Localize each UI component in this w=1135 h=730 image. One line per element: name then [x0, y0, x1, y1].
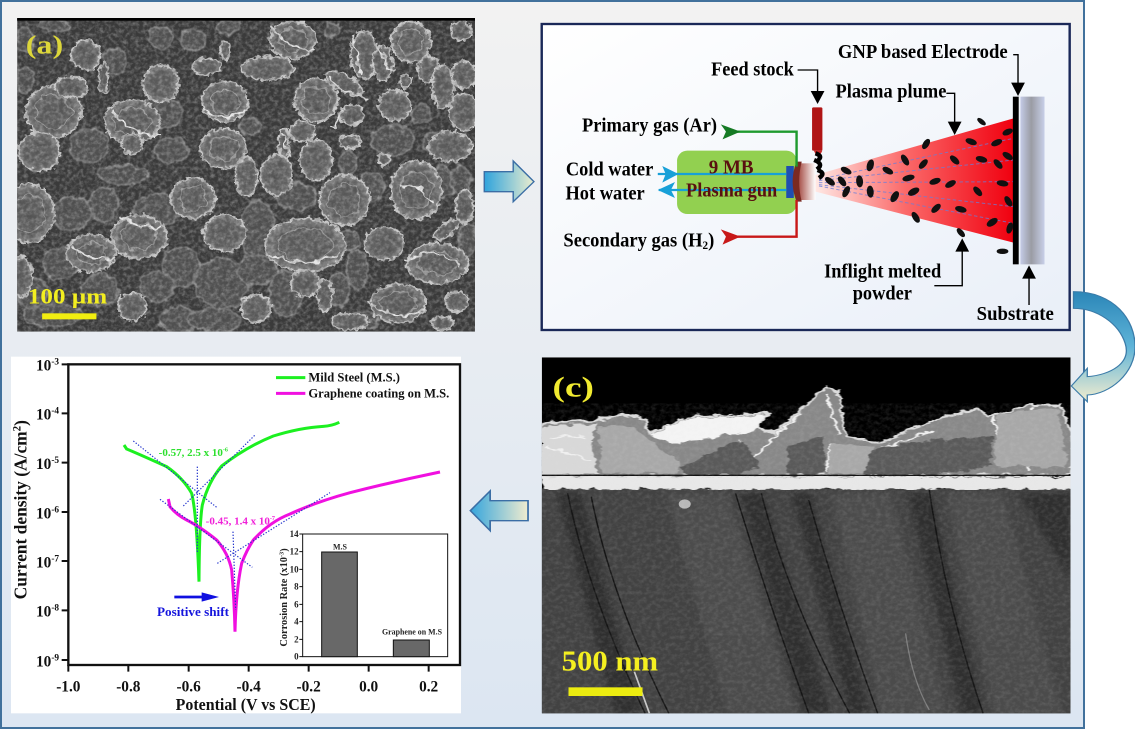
label: Inflight melted powder: powder — [853, 283, 912, 304]
substrate — [1020, 97, 1045, 264]
label: Cold water: Cold water — [566, 159, 653, 180]
scale bar 100 µm — [28, 284, 107, 319]
y axis title: ) — [11, 420, 32, 426]
x axis labels: -0.8 — [116, 678, 141, 695]
y axis labels: -7 — [51, 554, 59, 564]
primary gas line — [721, 124, 797, 167]
substrate layer — [542, 488, 1070, 713]
y axis labels: 10 — [36, 554, 51, 571]
cold water line — [658, 166, 786, 183]
x axis labels: 0.2 — [419, 678, 438, 695]
y axis labels: 10 — [36, 653, 51, 670]
panel: SEM image (a) of powder — [3, 18, 479, 333]
scale bar 100 µm: 100 µm — [28, 284, 107, 308]
inset bar chart: 4 — [294, 617, 299, 627]
inset bar chart: 2 — [294, 634, 299, 644]
curve: graphene coating — [168, 472, 440, 632]
panel: polarization chart — [11, 357, 461, 714]
inset bar chart: 6 — [294, 599, 299, 609]
arrow: panel c to chart — [470, 491, 528, 531]
panel: plasma spray schematic (b) — [542, 24, 1070, 330]
y axis labels: 10 — [36, 505, 51, 522]
label: Plasma plume — [835, 81, 962, 135]
label: GNP based Electrode: GNP based Electrode — [838, 41, 1008, 63]
inset bar chart: 0 — [294, 652, 299, 662]
positive shift arrow — [174, 592, 219, 602]
y axis title: 2 — [12, 425, 24, 431]
inset bar chart: Graphene on M.S — [382, 627, 443, 636]
y axis title: Current density (A/cm — [11, 426, 31, 599]
y axis labels: -8 — [51, 604, 59, 614]
inset bar chart: ) — [278, 548, 290, 552]
label: Feed stock — [711, 59, 824, 104]
legend: Mild Steel (M.S.) — [308, 371, 400, 385]
y axis labels: 10 — [36, 407, 51, 424]
scale bar 500 nm: 500 nm — [562, 646, 658, 677]
scale bar 500 nm — [562, 646, 658, 696]
value label magenta: -0.45, 1.4 x 10 — [206, 517, 268, 528]
value label magenta: -7 — [270, 516, 275, 522]
positive shift label: Positive shift — [157, 605, 230, 619]
y axis labels: -5 — [51, 456, 59, 466]
y axis labels: 10 — [36, 456, 51, 473]
label: Secondary gas (H2): 2 — [703, 238, 708, 252]
inset bar chart: 8 — [294, 582, 299, 592]
arrow: panel a to panel b — [484, 161, 534, 202]
bright interface band — [542, 477, 1076, 489]
x axis labels: -0.6 — [177, 678, 201, 695]
inset bar chart: Corrosion Rate (x10 — [278, 552, 290, 647]
legend — [276, 371, 449, 401]
x axis labels: -0.2 — [297, 678, 321, 695]
value label green: -6 — [223, 447, 228, 453]
y axis labels: -3 — [51, 358, 59, 368]
panel label (c): (c) — [553, 372, 594, 403]
curved arrow: panel b to panel c — [1071, 292, 1135, 402]
electrode — [1013, 97, 1019, 264]
coating layer — [542, 387, 1074, 477]
y axis labels: 10 — [36, 604, 51, 621]
label: Hot water: Hot water — [565, 183, 645, 204]
label: Primary gas (Ar): Primary gas (Ar) — [582, 115, 717, 136]
plasma gun body — [677, 151, 816, 214]
panel label (a): (a) — [26, 30, 63, 59]
label: Feed stock: Feed stock — [711, 59, 794, 81]
inset bar chart: 10 — [290, 564, 299, 574]
panel: SEM cross-section image (c) — [542, 357, 1076, 713]
tangent lines — [133, 435, 330, 610]
y axis labels: -4 — [51, 407, 59, 417]
legend: Graphene coating on M.S. — [308, 387, 449, 401]
y axis labels — [36, 358, 59, 670]
label: 9 MB plasma gun: Plasma gun — [686, 180, 777, 201]
label: Substrate — [977, 265, 1054, 325]
x axis title: Potential (V vs SCE) — [176, 695, 316, 714]
y axis labels: -9 — [51, 653, 59, 663]
y axis labels: 10 — [36, 358, 51, 375]
label: Substrate: Substrate — [977, 303, 1054, 325]
inset bar chart: -3 — [279, 551, 286, 557]
x axis labels: 0.0 — [359, 678, 379, 695]
label: Secondary gas (H2): Secondary gas (H — [563, 230, 718, 251]
label: Inflight melted powder: Inflight melted — [824, 261, 942, 282]
label: Inflight melted powder — [824, 238, 969, 304]
label: 9 MB plasma gun: 9 MB — [709, 157, 754, 178]
label: GNP based Electrode — [838, 41, 1025, 96]
inset bar chart — [278, 529, 448, 662]
hot water line — [658, 182, 786, 198]
x axis labels: -0.4 — [237, 678, 261, 695]
secondary gas line — [721, 200, 797, 245]
y axis labels: -6 — [51, 505, 59, 515]
label: 9 MB plasma gun — [686, 157, 777, 201]
inset bar chart: 14 — [290, 529, 299, 539]
inset bar chart: M.S — [333, 542, 348, 551]
spray dashed lines — [819, 138, 1014, 223]
inflight melted particles — [824, 118, 1013, 253]
chart axes — [62, 364, 460, 672]
feed stock injector — [812, 107, 822, 178]
value label green: -0.57, 2.5 x 10 — [159, 448, 221, 459]
label: Plasma plume: Plasma plume — [835, 81, 946, 102]
x axis labels — [56, 678, 438, 695]
particle on surface — [679, 499, 691, 509]
curve: mild steel — [124, 422, 339, 582]
inset bar chart: 12 — [290, 547, 299, 557]
label: Secondary gas (H2): ) — [708, 230, 714, 251]
plasma plume — [816, 118, 1014, 243]
x axis labels: -1.0 — [56, 678, 81, 695]
